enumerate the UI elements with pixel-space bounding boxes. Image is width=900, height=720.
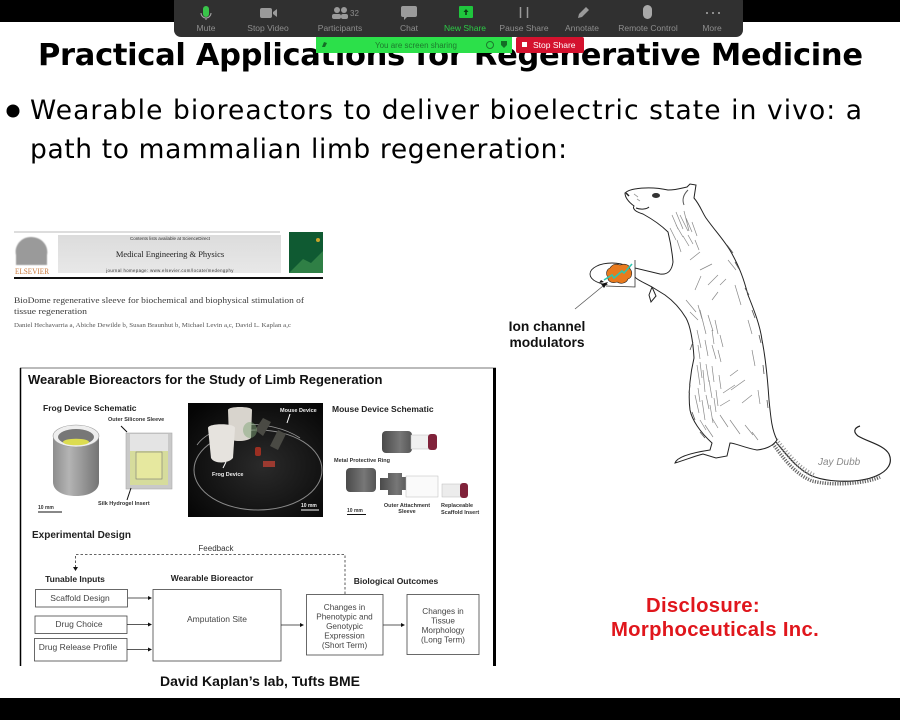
icon: video camera: [260, 8, 277, 18]
toolbar labels: Pause Share: [499, 23, 549, 33]
toolbar labels: Stop Video: [247, 23, 289, 33]
tunable inputs: Scaffold Design: [50, 593, 110, 603]
mouse device schematic: Replaceable: [441, 503, 473, 509]
panel heading: Wearable Bioreactors for the Study of Limb Regeneration: [28, 372, 382, 387]
biological outcomes: [306, 576, 479, 655]
disclosure: Morphoceuticals Inc.: [611, 619, 819, 641]
icon: new share: [459, 6, 473, 18]
biological outcomes: Biological Outcomes: [354, 576, 439, 586]
bullet text: Wearable bioreactors to deliver bioelectric state in vivo: a: [30, 95, 862, 126]
biological outcomes: (Long Term): [421, 636, 465, 644]
icon: chat: [401, 6, 417, 20]
icon: elsevier logo: [15, 237, 50, 276]
icon: assembled mouse device: [382, 431, 437, 453]
screen sharing banner: You are screen sharing: [375, 41, 457, 50]
feedback loop arrow: Feedback: [198, 544, 235, 553]
experimental design flowchart: [32, 530, 479, 661]
participant count: 32: [350, 9, 359, 18]
tunable inputs: Drug Release Profile: [39, 642, 117, 652]
biological outcomes: Expression: [324, 632, 365, 640]
icon: frog cylinder: [53, 425, 99, 496]
frog device schematic: Outer Silicone Sleeve: [108, 417, 164, 423]
journal cover: [289, 232, 323, 273]
bottom black band: [0, 698, 900, 720]
bullet text: [6, 95, 862, 165]
toolbar labels: Mute: [197, 23, 216, 33]
bullet text: path to mammalian limb regeneration:: [30, 134, 567, 165]
icon: orange ion channel: [607, 264, 632, 283]
zoom toolbar: [174, 0, 743, 37]
screen sharing banner: [316, 37, 512, 53]
label: ion channel modulators: modulators: [509, 335, 585, 350]
toolbar labels: Chat: [400, 23, 419, 33]
icon: mouse device parts: [346, 468, 468, 498]
biological outcomes: Changes in: [422, 607, 464, 616]
mouse device schematic: Scaffold Insert: [441, 510, 479, 516]
credit caption: David Kaplan’s lab, Tufts BME: [160, 673, 360, 689]
icon: more: [706, 12, 720, 14]
toolbar labels: More: [702, 23, 722, 33]
icon: frog cross section: [126, 433, 172, 489]
label: ion channel modulators: [509, 319, 585, 350]
frog device schematic: Frog Device Schematic: [43, 403, 137, 413]
panel: wearable bioreactors: [20, 368, 496, 666]
icon: pause: [520, 7, 528, 18]
rat tail: [773, 426, 890, 484]
icon: mute microphone: [201, 6, 211, 20]
rat face: [626, 190, 688, 209]
frog device schematic: Silk Hydrogel Insert: [98, 501, 150, 507]
icon: participants: [332, 7, 348, 19]
journal header: journal homepage: www.elsevier.com/locate/medengphy: [105, 268, 234, 273]
mouse device schematic: Mouse Device Schematic: [332, 404, 434, 414]
tunable inputs: Tunable Inputs: [45, 574, 105, 584]
article title: [14, 295, 304, 316]
wearable bioreactor: [153, 573, 281, 661]
icon: elsevier logo: ELSEVIER: [15, 267, 50, 276]
experimental design flowchart: Experimental Design: [32, 530, 131, 541]
toolbar labels: Annotate: [565, 23, 599, 33]
bioreactor sleeve on paw: [590, 260, 635, 287]
mouse device schematic: Outer Attachment: [384, 503, 430, 509]
device photo: Mouse Device: [280, 408, 317, 414]
frog device schematic: [38, 403, 172, 512]
disclosure: Disclosure:: [646, 595, 760, 617]
mouse device schematic: Sleeve: [398, 509, 416, 515]
journal header: Medical Engineering & Physics: [116, 249, 224, 259]
biological outcomes: Genotypic: [326, 622, 363, 631]
toolbar labels: New Share: [444, 23, 486, 33]
rat illustration: [625, 184, 890, 484]
journal header: Contents lists available at ScienceDirect: [130, 236, 211, 241]
mouse device schematic: Metal Protective Ring: [334, 458, 390, 464]
article title: tissue regeneration: [14, 306, 88, 316]
journal banner: [58, 235, 281, 273]
biological outcomes: Changes in: [324, 603, 366, 612]
label: ion channel modulators: Ion channel: [509, 319, 585, 334]
title: Practical Applications for Regenerative Medicine: [38, 38, 863, 73]
top black band: [0, 0, 900, 22]
biological outcomes: Phenotypic and: [316, 612, 373, 622]
tunable inputs: Drug Choice: [55, 619, 103, 629]
rat body: [625, 184, 777, 463]
biological outcomes: Tissue: [431, 616, 455, 626]
arrow to outcomes: [281, 623, 405, 627]
artist credit: Jay Dubb: [817, 457, 861, 468]
device photo: [188, 403, 323, 517]
wearable bioreactor: Amputation Site: [187, 614, 247, 624]
wearable bioreactor: Wearable Bioreactor: [171, 573, 254, 583]
stop share button: [516, 37, 584, 53]
rat neck and back edge texture: [689, 245, 768, 438]
biological outcomes: (Short Term): [322, 641, 367, 650]
mouse device schematic: 10 mm: [347, 508, 363, 514]
article title: BioDome regenerative sleeve for biochemical and biophysical stimulation of: [14, 295, 304, 305]
tunable inputs: [34, 574, 128, 661]
disclosure: [611, 595, 819, 641]
icon: annotate: [578, 7, 589, 18]
biological outcomes: Morphology: [422, 626, 465, 635]
toolbar labels: [197, 23, 722, 33]
stop share button: Stop Share: [533, 40, 576, 50]
feedback loop arrow: [73, 544, 345, 594]
journal header: [14, 232, 323, 279]
frog device schematic: 10 mm: [38, 505, 54, 511]
mouse device schematic: [332, 404, 479, 516]
toolbar labels: Participants: [318, 23, 362, 33]
rat fur shading: [670, 211, 760, 440]
input arrows: [127, 596, 152, 652]
arrow to sleeve: [575, 282, 608, 309]
device photo: Frog Device: [212, 472, 243, 478]
toolbar labels: Remote Control: [618, 23, 678, 33]
device photo: 10 mm: [301, 503, 317, 509]
icon: remote control: [643, 5, 652, 19]
article authors: Daniel Hechavarria a, Abiche Dewilde b, Susan Braunhut b, Michael Levin a,c, David L. Kaplan a,c: [14, 323, 291, 329]
